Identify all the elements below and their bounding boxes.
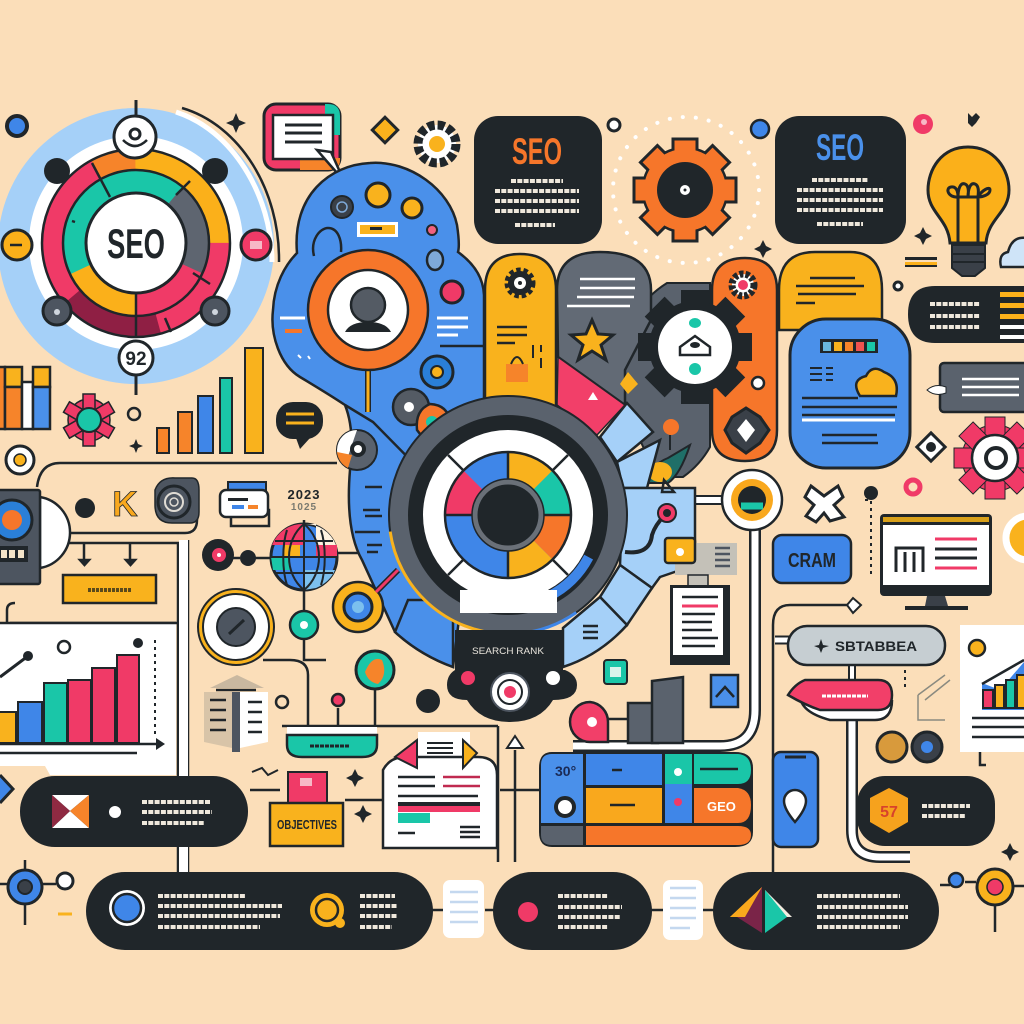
- icon: pink key: [570, 702, 628, 742]
- icon: left target: [6, 446, 34, 474]
- icon: yellow cloud: [856, 369, 897, 396]
- panel: dark pill right: 57: [880, 804, 898, 821]
- icon: bottom badge: 92: [125, 349, 147, 370]
- box: teal label: [287, 727, 377, 757]
- icon: monitor: [880, 514, 992, 608]
- text: 2023 label: [288, 487, 320, 513]
- icon: document: [670, 575, 730, 665]
- box: yellow label: [63, 575, 156, 603]
- panel: yellow pill with gear: [485, 254, 556, 410]
- icon: yellow search ring: [310, 893, 345, 928]
- icon: note second: [663, 880, 703, 940]
- icon: ring target: [722, 470, 782, 530]
- icon: pin dot: [864, 486, 878, 576]
- icon: red gear: [954, 417, 1024, 499]
- chart: wheel segments: [441, 448, 575, 582]
- icon: leaf: [646, 445, 690, 483]
- icon: left bottom target: [8, 870, 73, 914]
- icon: pink gear left: [63, 394, 115, 446]
- panel: chart card right: [960, 625, 1024, 765]
- icon: node left: [2, 230, 32, 260]
- icon: left edge diamond: [0, 775, 13, 803]
- icon: speech bubble: [276, 402, 323, 449]
- panel: right dark pill: [908, 286, 1024, 343]
- panel: bottom pill right: [713, 872, 939, 950]
- panel: red pill: [788, 680, 892, 720]
- icon: machine panel left: [0, 490, 70, 584]
- panel: bottom pill middle: [493, 872, 652, 950]
- panel: SEO orange card: [474, 116, 602, 244]
- icon: top badge: [114, 116, 156, 158]
- icon: pink ring: [906, 480, 920, 494]
- icon: right bottom target: [949, 869, 1013, 905]
- panel: blue label CRAM: [773, 535, 851, 583]
- icon: triangles: [730, 887, 792, 933]
- panel: big dark dial: [342, 349, 674, 681]
- icon: dark gear over pill: [638, 290, 752, 404]
- panel: grey tag: [927, 363, 1024, 412]
- connector lines: [0, 463, 1024, 932]
- text lines: [495, 181, 579, 225]
- icon: bottom badge: [119, 341, 153, 375]
- panel: grey pill with star: [557, 252, 651, 435]
- panel: blue rounded card: [790, 319, 910, 468]
- arrow: up: [507, 736, 523, 748]
- panel: SEO blue card: [775, 116, 906, 244]
- icon: node left top: [44, 158, 70, 184]
- bar chart: [0, 655, 139, 743]
- text lines: [158, 896, 282, 927]
- text: lobe marks: [363, 487, 432, 634]
- icon: rings: [276, 694, 344, 708]
- connector: white channel: [179, 540, 188, 872]
- colour bar: [820, 339, 878, 353]
- icon: compass circle: [198, 589, 274, 665]
- icon: dashboard knob: [556, 798, 574, 816]
- panel: dial sectors: [395, 403, 695, 667]
- panel: dial base: [447, 630, 577, 722]
- icon: teal tile: [604, 660, 627, 684]
- panel: orange pill: [712, 258, 777, 461]
- arrow pair: [80, 543, 135, 565]
- icon: bowtie: [52, 795, 89, 828]
- icon: yellow ring: [333, 582, 383, 632]
- panel: central blue cloud: [272, 163, 484, 667]
- icon: node lower right: [201, 297, 229, 325]
- chart: growing bars: [157, 348, 263, 453]
- icon: diamond outline: [917, 433, 945, 461]
- panel: dial base: SEARCH RANK: [472, 646, 544, 656]
- icon: round pair: [877, 732, 942, 762]
- heading: SEO centre: SEO: [107, 220, 165, 267]
- icon: dark dots pair: [202, 539, 256, 571]
- chart: donut outer ring: [23, 130, 249, 356]
- panel: SEO donut wheel: [0, 100, 279, 395]
- icon: document card: [264, 104, 344, 181]
- icon: small dot: [608, 119, 620, 131]
- panel: dark pill right: [857, 776, 995, 846]
- icon: dark dot: [416, 689, 440, 713]
- text lines: [797, 180, 883, 224]
- icon: X mark: [805, 486, 844, 522]
- icon: orange gear with dotted ring: [613, 117, 759, 263]
- icon: stripes: [905, 257, 937, 267]
- panel: grey pill label: SBTABBEA: [835, 638, 917, 654]
- icon: small gear: [418, 125, 456, 163]
- icon: star marks: [129, 113, 1019, 861]
- icon: yellow circle right: [1006, 516, 1024, 560]
- icon: blue dot top: [751, 120, 769, 138]
- connector channel: white pipe right: [573, 500, 910, 857]
- icon: orange dot: [663, 419, 679, 450]
- icon: globe small: [356, 651, 394, 689]
- icon: arrow head: [847, 598, 861, 613]
- panel: SEO blue card: SEO: [816, 127, 864, 168]
- icon: globe: [271, 524, 337, 590]
- icon: sector marks: [583, 480, 674, 638]
- chart: donut inner ring: [49, 156, 223, 330]
- icon: blue chevron tile: [711, 675, 738, 707]
- panel: dark pill left: [20, 776, 248, 847]
- icon: yellow tag: [665, 538, 737, 575]
- icon: diamond: [372, 117, 398, 143]
- icon: light bulb: [928, 147, 1009, 276]
- panel: bar chart box: [0, 623, 176, 775]
- icon: pink connector node: [625, 504, 676, 552]
- chart: small bars left: [0, 367, 50, 429]
- icon: dark gear: [638, 290, 752, 404]
- icon: K badge row: [75, 478, 199, 524]
- panel: grey dark gear backdrop: [600, 283, 710, 483]
- panel: SEO orange card: SEO: [512, 131, 562, 172]
- icon: phone: [773, 752, 818, 847]
- icon: tiny tools: [918, 675, 950, 720]
- box: yellow folder: OBJECTIVES: [277, 817, 337, 832]
- icon: teal pin: [290, 611, 318, 639]
- text: 2023 label: 2023: [288, 487, 320, 502]
- icon: mini card: [220, 482, 269, 526]
- icon: open document: [383, 732, 497, 848]
- box: yellow folder: [270, 772, 343, 846]
- icon: node right top: [202, 158, 228, 184]
- icon: pink dot: [913, 114, 933, 134]
- icon: K badge row: K: [112, 485, 138, 524]
- panel: bottom pill left: [86, 872, 433, 950]
- icon: ring marker: [894, 282, 902, 290]
- panel: yellow tall card: [779, 252, 882, 330]
- icon: node with ring: [337, 430, 377, 470]
- icon: open book box: [204, 675, 268, 752]
- icon: red connector: [376, 570, 398, 592]
- icon: dot marker: [128, 408, 140, 420]
- icon: small marks: [252, 768, 278, 775]
- icon: node right: [241, 230, 271, 260]
- icon: blue dot: [7, 116, 27, 136]
- text: dashboard labels: 30°: [555, 763, 576, 779]
- panel: grey pill label: [788, 626, 945, 665]
- icon: dotted marks: [904, 670, 906, 690]
- icon: blue ring: [109, 890, 145, 926]
- panel: colour dashboard: [539, 752, 753, 847]
- icon: node lower left: [43, 297, 71, 325]
- icon: cloud: [1000, 238, 1024, 267]
- panel: blue label CRAM: CRAM: [788, 550, 836, 572]
- icon: note: [443, 880, 484, 938]
- panel: colour dashboard: GEO: [707, 799, 736, 814]
- icon: skyline bars: [628, 677, 683, 743]
- icon: orange target: [308, 250, 428, 412]
- icon: cloud nodes: [280, 183, 468, 443]
- text: 2023 label: 1025: [291, 502, 317, 513]
